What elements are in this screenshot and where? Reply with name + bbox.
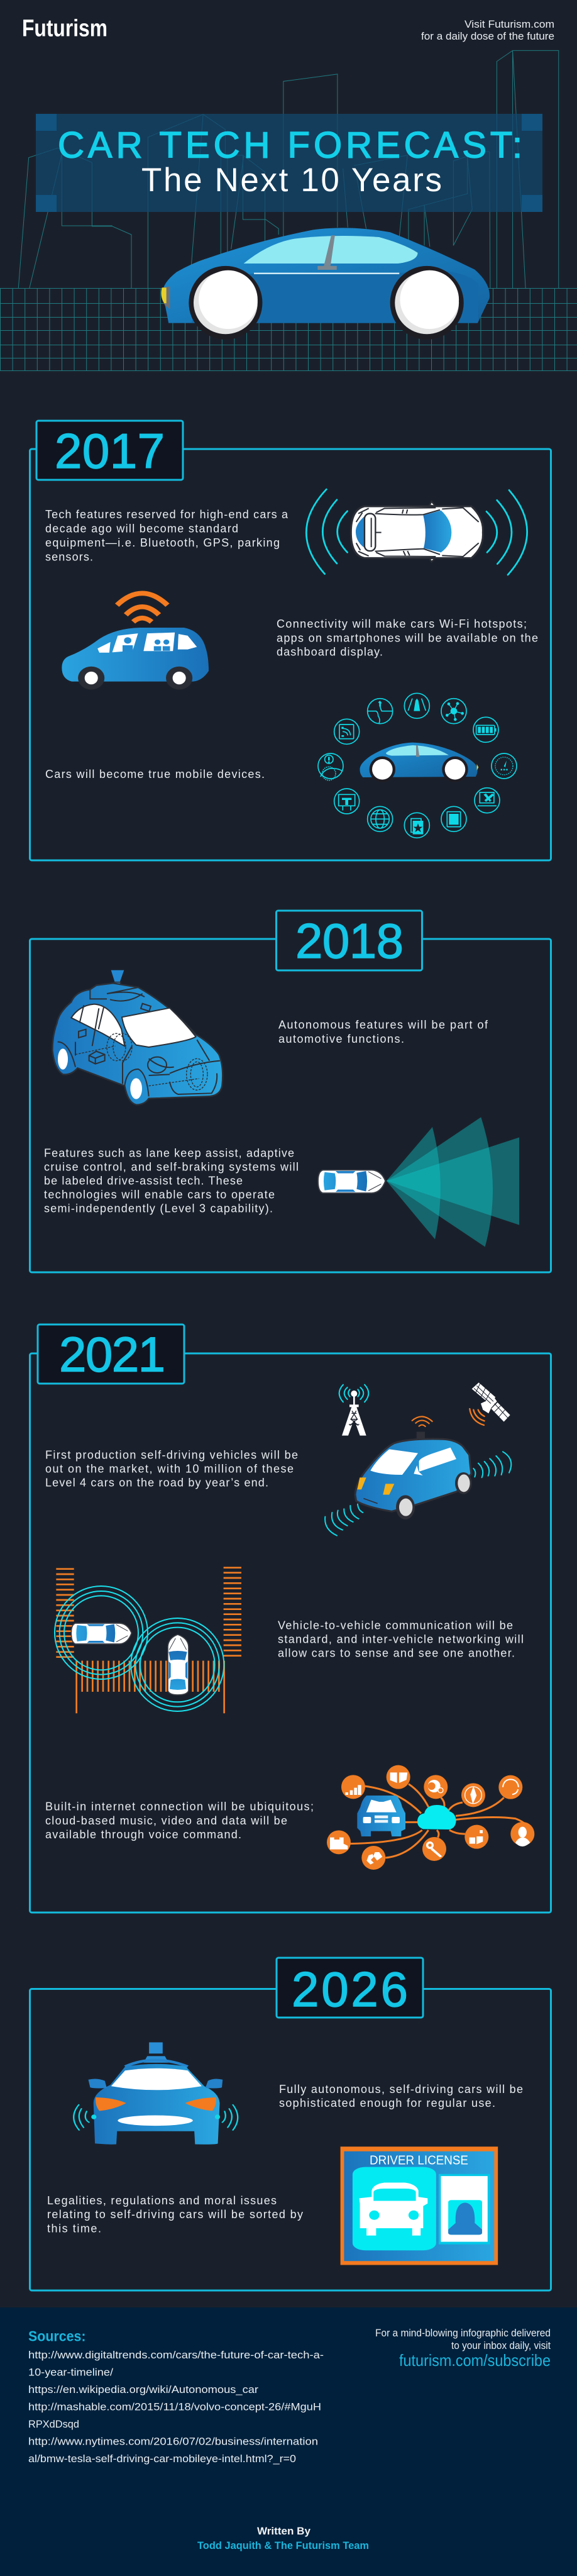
subscribe callout — [375, 2327, 551, 2370]
text: level 4 vehicles: Level 4 cars on the road by year’s end. — [45, 1477, 268, 1489]
text: legalities: this time. — [47, 2223, 101, 2235]
text: legalities — [47, 2194, 303, 2235]
text: fully autonomous — [279, 2083, 523, 2109]
text: drive-assist: cruise control, and self-braking systems will — [44, 1161, 299, 1174]
icon: front view self-driving car — [74, 2042, 238, 2145]
text: connectivity — [277, 618, 538, 658]
hero car — [161, 228, 490, 340]
icon: cloud — [417, 1805, 456, 1829]
top-view car 1 — [71, 1623, 131, 1644]
header section — [0, 15, 577, 371]
icon: satellite — [470, 1382, 510, 1425]
sensor cones — [387, 1117, 519, 1247]
year badge 2026: 2026 — [292, 1962, 408, 2017]
icon: cloud network diagram — [327, 1765, 534, 1870]
text: legalities: Legalities, regulations and moral issues — [47, 2194, 277, 2207]
ground grid — [0, 288, 577, 371]
app icon ring — [318, 693, 517, 838]
panel: 2026 — [30, 1958, 551, 2290]
header tagline — [421, 18, 554, 42]
title line 1: CAR TECH FORECAST: — [58, 125, 522, 166]
top-view car — [318, 1170, 385, 1193]
text: drive-assist: Features such as lane keep assist, adaptive — [44, 1147, 294, 1160]
sources list: http://www.digitaltrends.com/cars/the-future-of-car-tech-a- — [28, 2349, 324, 2361]
text: connectivity: apps on smartphones will be available on the — [277, 631, 538, 644]
credits: Todd Jaquith & The Futurism Team — [197, 2540, 369, 2551]
text: connectivity: dashboard display. — [277, 645, 383, 658]
icon: cell tower — [339, 1385, 368, 1436]
text: autonomous features — [278, 1019, 488, 1045]
sources list: https://en.wikipedia.org/wiki/Autonomous_car — [28, 2384, 258, 2396]
icon: front-view car — [357, 1796, 405, 1836]
text: connectivity: Connectivity will make cars Wi-Fi hotspots; — [277, 618, 527, 630]
title banner — [36, 114, 542, 212]
text: vehicle to vehicle: standard, and inter-vehicle networking will — [278, 1633, 524, 1645]
text: drive-assist: semi-independently (Level 3 capability). — [44, 1202, 273, 1215]
text: standard equipment: Tech features reserved for high-end cars a — [45, 508, 288, 521]
icon: vehicle-to-vehicle cars in parking lot — [55, 1568, 241, 1713]
icon: self-driving car, tower and satellite — [325, 1382, 511, 1536]
text: drive-assist — [44, 1147, 299, 1215]
header tagline: Visit Futurism.com — [464, 18, 554, 30]
sources list: al/bmw-tesla-self-driving-car-mobileye-intel.html?_r=0 — [28, 2453, 296, 2465]
panel: 2018 — [30, 911, 551, 1272]
text: autonomous features: automotive functions. — [278, 1033, 404, 1045]
subscribe callout: to your inbox daily, visit — [451, 2340, 551, 2351]
subscribe callout: For a mind-blowing infographic delivered — [375, 2327, 551, 2339]
text: drive-assist: technologies will enable cars to operate — [44, 1189, 275, 1201]
text: vehicle to vehicle — [278, 1619, 524, 1659]
icon: connected car with wi-fi — [62, 593, 209, 689]
orange service nodes — [327, 1765, 534, 1870]
icon: top-view car with parking sensor waves — [306, 489, 527, 575]
text: drive-assist: be labeled drive-assist tech. These — [44, 1175, 243, 1187]
top-view car 2 — [168, 1635, 189, 1695]
sources list: http://www.nytimes.com/2016/07/02/business/internation — [28, 2435, 318, 2448]
sources heading: Sources: — [28, 2328, 85, 2345]
node glyphs — [330, 1772, 530, 1865]
city skyline line art — [18, 50, 559, 288]
year badge 2018: 2018 — [295, 913, 404, 969]
logo: Futurism: Futurism — [22, 15, 107, 42]
subscribe callout: futurism.com/subscribe — [399, 2351, 551, 2370]
sources list: http://mashable.com/2015/11/18/volvo-concept-26/#MguH — [28, 2401, 321, 2412]
sources list: RPXdDsqd — [28, 2418, 79, 2430]
text: standard equipment: decade ago will become standard — [45, 522, 238, 535]
text: internet connection — [45, 1800, 314, 1841]
text: internet connection: available through voice command. — [45, 1828, 241, 1841]
icon: driver license card — [341, 2146, 498, 2265]
text: level 4 vehicles: out on the market, with 10 million of these — [45, 1463, 294, 1475]
panel: 2017 — [30, 421, 551, 860]
text: vehicle to vehicle: Vehicle-to-vehicle communication will be — [278, 1619, 513, 1631]
sources list: 10-year-timeline/ — [28, 2366, 113, 2379]
text: standard equipment: sensors. — [45, 551, 93, 564]
signal waves — [325, 1452, 511, 1536]
text: internet connection: cloud-based music, video and data will be — [45, 1814, 287, 1827]
text: standard equipment — [45, 508, 288, 564]
year badge 2017: 2017 — [55, 423, 165, 479]
title line 2: The Next 10 Years — [141, 162, 442, 199]
year badge 2021 — [38, 1324, 184, 1384]
text: level 4 vehicles: First production self-driving vehicles will be — [45, 1449, 298, 1462]
year badge 2018 — [277, 911, 422, 970]
license title: DRIVER LICENSE — [370, 2153, 468, 2167]
sources list — [28, 2349, 324, 2465]
credits — [197, 2525, 369, 2551]
text: autonomous features: Autonomous features will be part of — [278, 1019, 488, 1031]
text: standard equipment: equipment—i.e. Bluetooth, GPS, parking — [45, 536, 280, 549]
text: fully autonomous: sophisticated enough for regular use. — [279, 2097, 495, 2109]
icon: car surrounded by app icons — [318, 693, 517, 838]
footer — [0, 2307, 577, 2576]
panel: 2021 — [30, 1324, 551, 1913]
text: vehicle to vehicle: allow cars to sense and see one another. — [278, 1646, 515, 1659]
communication rings — [55, 1586, 224, 1711]
parking lines — [56, 1568, 241, 1713]
text: internet connection: Built-in internet connection will be ubiquitous; — [45, 1800, 314, 1813]
network links — [350, 1784, 527, 1858]
text: legalities: relating to self-driving cars will be sorted by — [47, 2208, 303, 2221]
icon: car with sensor cones — [318, 1117, 519, 1247]
icon: autonomous car with sensors — [52, 970, 223, 1105]
text: level 4 vehicles — [45, 1449, 298, 1489]
year badge 2021: 2021 — [59, 1327, 165, 1382]
icon: small car — [360, 743, 478, 782]
text: fully autonomous: Fully autonomous, self-driving cars will be — [279, 2083, 523, 2096]
header tagline: for a daily dose of the future — [421, 30, 554, 42]
credits: Written By — [257, 2525, 311, 2537]
text: mobile devices: Cars will become true mobile devices. — [45, 768, 265, 780]
